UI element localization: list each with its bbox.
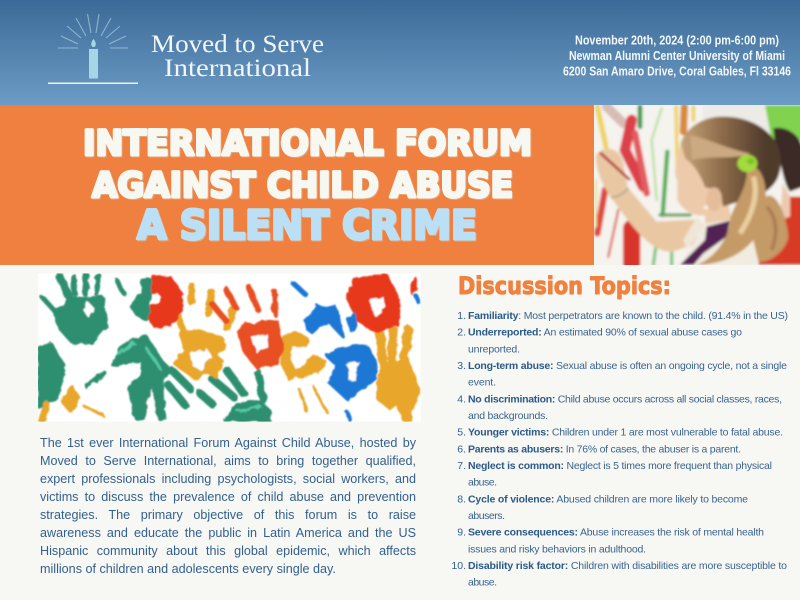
discussion topics list: 8.: [457, 493, 466, 505]
discussion topics list: and backgrounds.: [468, 410, 548, 422]
discussion topics list: Cycle of violence: Abused children are more likely to become: [468, 493, 748, 505]
discussion topics list: 1.: [457, 310, 466, 322]
organisation name: [151, 31, 324, 82]
organisation name: Moved to Serve: [151, 31, 324, 58]
discussion topics list: Severe consequences: Abuse increases the risk of mental health: [468, 527, 764, 539]
discussion topics list: Underreported: An estimated 90% of sexual abuse cases go: [468, 327, 742, 339]
discussion topics list: unreported.: [468, 343, 520, 355]
discussion topics list: 6.: [457, 443, 466, 455]
intro paragraph: millions of children and adolescents every single day.: [40, 562, 336, 576]
discussion topics list: 2.: [457, 327, 466, 339]
forum title: A SILENT CRIME: [137, 203, 477, 249]
forum title: INTERNATIONAL FORUM: [83, 124, 532, 164]
header band: [0, 0, 800, 105]
discussion topics list: No discrimination: Child abuse occurs across all social classes, races,: [468, 393, 782, 405]
photo: child painting: [594, 105, 800, 265]
forum title: [83, 124, 532, 249]
discussion topics list: Parents as abusers: In 76% of cases, the abuser is a parent.: [468, 443, 741, 455]
discussion topics list: Disability risk factor: Children with disabilities are more susceptible to: [468, 560, 787, 572]
discussion topics list: 5.: [457, 427, 466, 439]
discussion topics list: [451, 310, 788, 589]
discussion topics list: 10.: [451, 560, 466, 572]
discussion topics list: issues and risky behaviors in adulthood.: [468, 543, 646, 555]
discussion topics list: Long-term abuse: Sexual abuse is often an ongoing cycle, not a single: [468, 360, 787, 372]
intro paragraph: strategies. The primary objective of this forum is to raise: [40, 508, 416, 522]
organisation name: International: [164, 55, 311, 82]
discussion topics list: event.: [468, 377, 496, 389]
forum title: AGAINST CHILD ABUSE: [92, 166, 513, 206]
handprints image: [38, 273, 421, 422]
discussion topics list: Neglect is common: Neglect is 5 times more frequent than physical: [468, 460, 772, 472]
discussion topics list: Younger victims: Children under 1 are most vulnerable to fatal abuse.: [468, 427, 783, 439]
discussion topics list: abuse.: [468, 577, 497, 589]
discussion topics list: Familiarity: Most perpetrators are known to the child. (91.4% in the US): [468, 310, 788, 322]
discussion topics list: abuse.: [468, 477, 497, 489]
intro paragraph: Moved to Serve International, aims to bring together qualified,: [40, 454, 416, 468]
discussion topics list: 3.: [457, 360, 466, 372]
logo: candle with rays: [48, 14, 138, 84]
intro paragraph: Hispanic community about this global epidemic, which affects: [40, 544, 416, 558]
title banner: [0, 105, 800, 265]
event date and venue: [563, 32, 791, 78]
discussion topics list: 7.: [457, 460, 466, 472]
intro paragraph: awareness and educate the public in Latin America and the US: [40, 526, 416, 540]
intro paragraph: expert professionals including psychologists, social workers, and: [40, 472, 416, 486]
intro paragraph: The 1st ever International Forum Against Child Abuse, hosted by: [40, 436, 416, 450]
discussion topics list: abusers.: [468, 510, 505, 522]
discussion topics list: 4.: [457, 393, 466, 405]
discussion topics list: 9.: [457, 527, 466, 539]
intro paragraph: victims to discuss the prevalence of child abuse and prevention: [40, 490, 416, 504]
